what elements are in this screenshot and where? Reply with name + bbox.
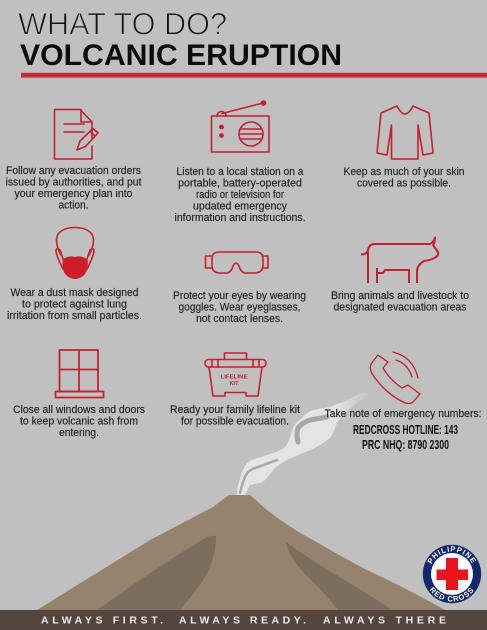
text: evacuation orders [6,165,142,212]
text: emergency numbers: Take note of emergency numbers: [324,408,482,420]
text: cover skin: Keep as much of your skin [344,166,464,178]
text: listen to radio: information and instructions. [174,212,306,224]
text: listen to radio: portable, battery-operated [178,178,302,190]
text: goggles: goggles. Wear eyeglasses, [178,302,300,314]
text: cover skin: covered as possible. [357,178,451,190]
logo: Philippine Red Cross: RED CROSS [430,586,474,602]
footer bar: ALWAYS READY. [179,614,306,626]
text: cover skin [344,166,464,190]
text: dust mask: irritation from small particles. [7,310,142,322]
text: dust mask: to protect against lung [22,298,127,310]
title: VOLCANIC ERUPTION [20,39,342,72]
icon: long-sleeve shirt [377,106,433,159]
text: close windows: entering. [59,427,99,439]
text: listen to radio [174,166,306,224]
title [18,6,342,72]
icon: document and pencil [54,110,98,159]
text: close windows: Close all windows and doors [13,404,146,416]
text: evacuation orders: your emergency plan into [14,188,132,200]
smoke plume [237,392,370,495]
text: dust mask: Wear a dust mask designed [10,287,138,299]
text: evacuation orders: Follow any evacuation orders [6,165,142,177]
text: close windows: to keep volcanic ash from [20,416,138,428]
text: goggles [173,290,306,325]
logo: Philippine Red Cross [422,544,482,604]
text: dust mask [7,287,142,322]
icon: window [56,350,104,398]
icon: lifeline kit: KIT [230,381,239,387]
footer bar [0,610,487,630]
icon: lifeline kit: LIFELINE [220,375,248,381]
icon: dust mask [56,228,94,279]
icon: goggles [206,252,268,273]
text: listen to radio: radio or television for [196,189,284,201]
footer bar: ALWAYS FIRST. [41,614,163,626]
text: livestock: designated evacuation areas [334,302,467,314]
text: listen to radio: Listen to a local station on a [176,166,304,178]
icon: lifeline kit [205,353,266,396]
title: WHAT TO DO? [18,6,227,42]
text: lifeline kit: for possible evacuation. [181,416,289,428]
volcano [37,495,445,610]
text: livestock: Bring animals and livestock to [331,290,469,302]
icon: cow [361,238,438,283]
icon: telephone [370,352,420,404]
text: evacuation orders: issued by authorities, and put [6,176,142,188]
icon: radio [212,101,269,152]
text: evacuation orders: action. [58,200,88,212]
text: livestock [331,290,469,314]
text: goggles: Protect your eyes by wearing [173,290,306,302]
text: listen to radio: updated emergency [193,200,288,212]
text: lifeline kit: Ready your family lifeline kit [170,404,300,416]
footer bar: ALWAYS THERE [323,614,446,626]
text: close windows [13,404,146,439]
text: goggles: not contact lenses. [196,313,283,325]
logo: Philippine Red Cross: PHILIPPINE [427,546,476,564]
text: emergency numbers [324,408,482,452]
text: lifeline kit [170,404,300,428]
